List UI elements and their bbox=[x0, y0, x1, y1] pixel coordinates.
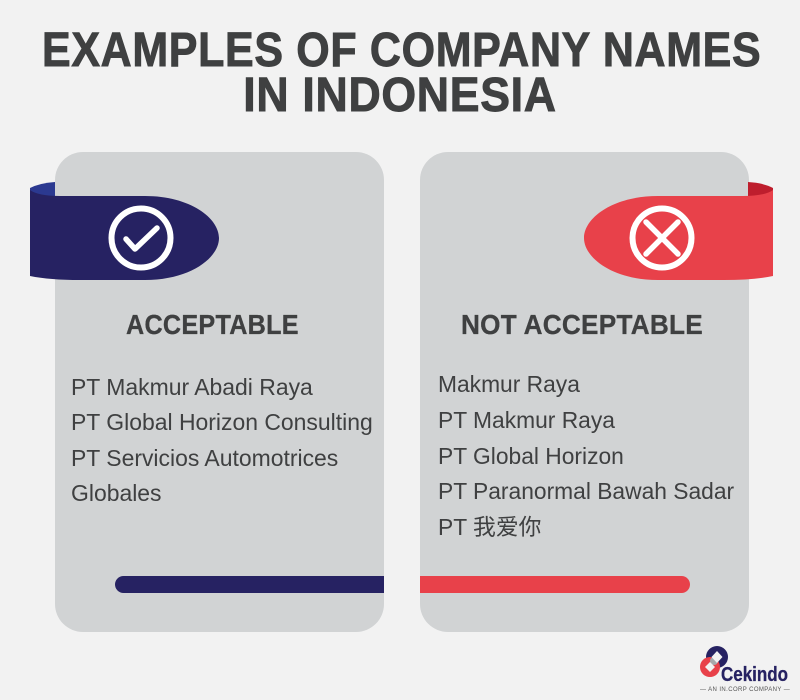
list: not acceptable names bbox=[438, 371, 734, 540]
heading: not acceptable: NOT ACCEPTABLE bbox=[461, 309, 703, 340]
list: not acceptable names: PT Paranormal Bawah Sadar bbox=[438, 478, 734, 504]
list: acceptable names: PT Servicios Automotrices bbox=[71, 445, 338, 471]
title: EXAMPLES OF COMPANY NAMES bbox=[42, 24, 761, 77]
bar: acceptable accent bbox=[115, 576, 384, 593]
list: not acceptable names: PT Makmur Raya bbox=[438, 407, 615, 433]
text: logo name: Cekindo bbox=[721, 664, 788, 686]
ribbon: not acceptable with cross icon bbox=[584, 182, 773, 280]
icon: logo mark bbox=[700, 646, 728, 677]
list: acceptable names: Globales bbox=[71, 480, 162, 506]
ribbon: acceptable with check icon bbox=[30, 182, 219, 280]
title: IN INDONESIA bbox=[243, 68, 557, 122]
panel: acceptable card bbox=[55, 152, 384, 632]
list: acceptable names: PT Global Horizon Consulting bbox=[71, 409, 373, 435]
title bbox=[42, 24, 761, 122]
list: acceptable names: PT Makmur Abadi Raya bbox=[71, 374, 313, 400]
bar: not acceptable accent bbox=[420, 576, 690, 593]
text: logo tagline: — AN IN.CORP COMPANY — bbox=[700, 687, 790, 693]
logo: Cekindo bbox=[700, 646, 790, 693]
list: acceptable names bbox=[71, 374, 373, 506]
list: not acceptable names: PT 我爱你 bbox=[438, 514, 541, 540]
heading: acceptable: ACCEPTABLE bbox=[126, 309, 299, 340]
list: not acceptable names: Makmur Raya bbox=[438, 371, 580, 397]
list: not acceptable names: PT Global Horizon bbox=[438, 443, 624, 469]
panel: not acceptable card bbox=[420, 152, 749, 632]
